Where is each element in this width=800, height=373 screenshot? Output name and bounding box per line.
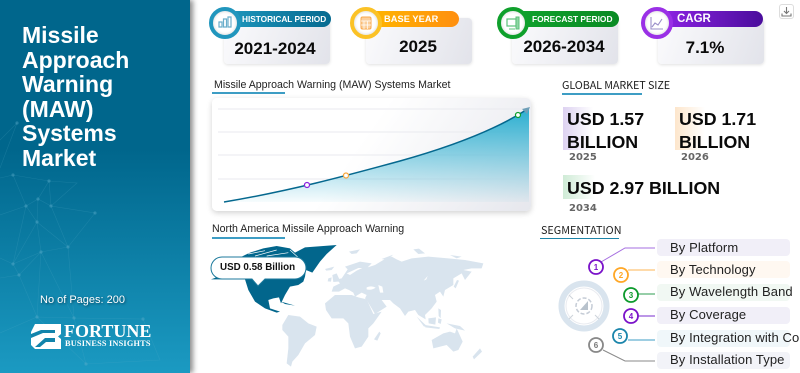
card background (658, 18, 764, 64)
heading: segmentation: SEGMENTATION (541, 222, 622, 238)
text: By Coverage (670, 307, 746, 322)
value (679, 109, 756, 152)
panel: historical period (209, 7, 331, 66)
tint (563, 107, 593, 150)
segment 2: by technology (657, 261, 790, 278)
callout: USD 0.58 billion (210, 256, 306, 286)
value: 2025: 2025 (399, 37, 437, 56)
icon: calendar ring (350, 7, 382, 39)
pill: forecast period (523, 11, 619, 27)
marker: 2034 (516, 112, 520, 118)
year: 2025 (569, 152, 597, 163)
numbered badges: 5 (618, 332, 623, 341)
text: By Technology (670, 262, 756, 277)
text: By Platform (670, 240, 738, 255)
icon: download button (779, 4, 794, 19)
pill: base year (376, 11, 459, 27)
title (22, 22, 129, 170)
eurasia and northern islands (325, 249, 483, 319)
panel: forecast period (497, 7, 619, 66)
heading: north america: North America Missile Approach Warning (212, 223, 404, 235)
stat: USD 2.97 billion 2034 (563, 175, 720, 214)
value: USD 1.57 (567, 109, 644, 129)
segment hub graphic (558, 280, 610, 332)
numbered badges: 2 (619, 271, 624, 280)
title: Missile (22, 22, 99, 48)
value (567, 109, 644, 152)
pill: historical period: HISTORICAL PERIOD (242, 14, 326, 24)
value: BILLION (567, 132, 638, 152)
title: Market (22, 144, 96, 170)
heading: market chart: Missile Approach Warning (MAW) Systems Market (214, 79, 450, 91)
callout value: USD 0.58 Billion (220, 262, 295, 273)
connector lines (601, 248, 655, 362)
segment 6: by installation type (657, 352, 790, 369)
text: By Wavelength Band (670, 284, 793, 299)
pill: base year: BASE YEAR (384, 14, 438, 24)
value: USD 2.97 BILLION (567, 178, 720, 198)
north america highlighted (211, 245, 337, 313)
numbered badges: 4 (629, 312, 634, 321)
heading: global market size: GLOBAL MARKET SIZE (562, 77, 670, 93)
pill: historical period (234, 11, 331, 27)
south america (282, 315, 317, 367)
stat: USD 1.71 billion 2026 (675, 107, 756, 163)
segment 5: by integration (657, 330, 790, 347)
title: (MAW) (22, 96, 94, 122)
value: 2026-2034: 2026-2034 (523, 37, 605, 56)
value: USD 1.71 (679, 109, 756, 129)
marker: 2025 (304, 182, 310, 188)
panel: CAGR (641, 7, 765, 66)
area chart graphic (218, 107, 530, 203)
text: By Installation Type (670, 352, 784, 367)
year: 2034 (569, 203, 597, 214)
oceania and islands (374, 308, 482, 359)
panel: area chart (212, 98, 531, 211)
value: BILLION (679, 132, 750, 152)
card background (224, 18, 330, 64)
stat: USD 1.57 billion 2025 (563, 107, 644, 163)
icon: forecast ring (497, 7, 529, 39)
icon: growth ring (641, 7, 673, 39)
world map (211, 245, 484, 366)
value: 2021-2024: 2021-2024 (234, 39, 316, 58)
segment 4: by coverage (657, 307, 790, 324)
pages note: No of Pages: 200 (40, 294, 125, 306)
segment 1: by platform (657, 239, 790, 256)
title: Approach (22, 46, 129, 72)
pill: CAGR: CAGR (677, 13, 711, 25)
panel: sidebar (0, 0, 190, 373)
card background (512, 18, 618, 64)
decorative network pattern (0, 122, 160, 366)
card background (366, 18, 472, 64)
numbered badges: 6 (594, 341, 599, 350)
value: 7.1%: 7.1% (686, 38, 724, 57)
panel: base year (350, 7, 473, 66)
segment 3: by wavelength band (657, 284, 790, 301)
tint (675, 107, 705, 150)
logo tagline: BUSINESS INSIGHTS (65, 339, 151, 348)
pill: forecast period: FORECAST PERIOD (532, 14, 612, 24)
numbered badges: 3 (629, 291, 634, 300)
numbered badges: 1 (594, 263, 599, 272)
africa (325, 295, 382, 348)
logo wordmark: FORTUNE (64, 321, 151, 341)
icon: bar chart ring (209, 7, 241, 39)
year: 2026 (681, 152, 709, 163)
pill: CAGR (667, 11, 763, 27)
title: Warning (22, 71, 113, 97)
marker: 2026 (344, 173, 348, 178)
text: By Integration with Co (670, 330, 799, 345)
tint (563, 175, 595, 199)
numbered badges (588, 259, 639, 353)
icon: FB logo mark (31, 324, 61, 349)
title: Systems (22, 120, 117, 146)
logo: Fortune Business Insights (31, 321, 151, 349)
callout bubble (210, 256, 306, 286)
